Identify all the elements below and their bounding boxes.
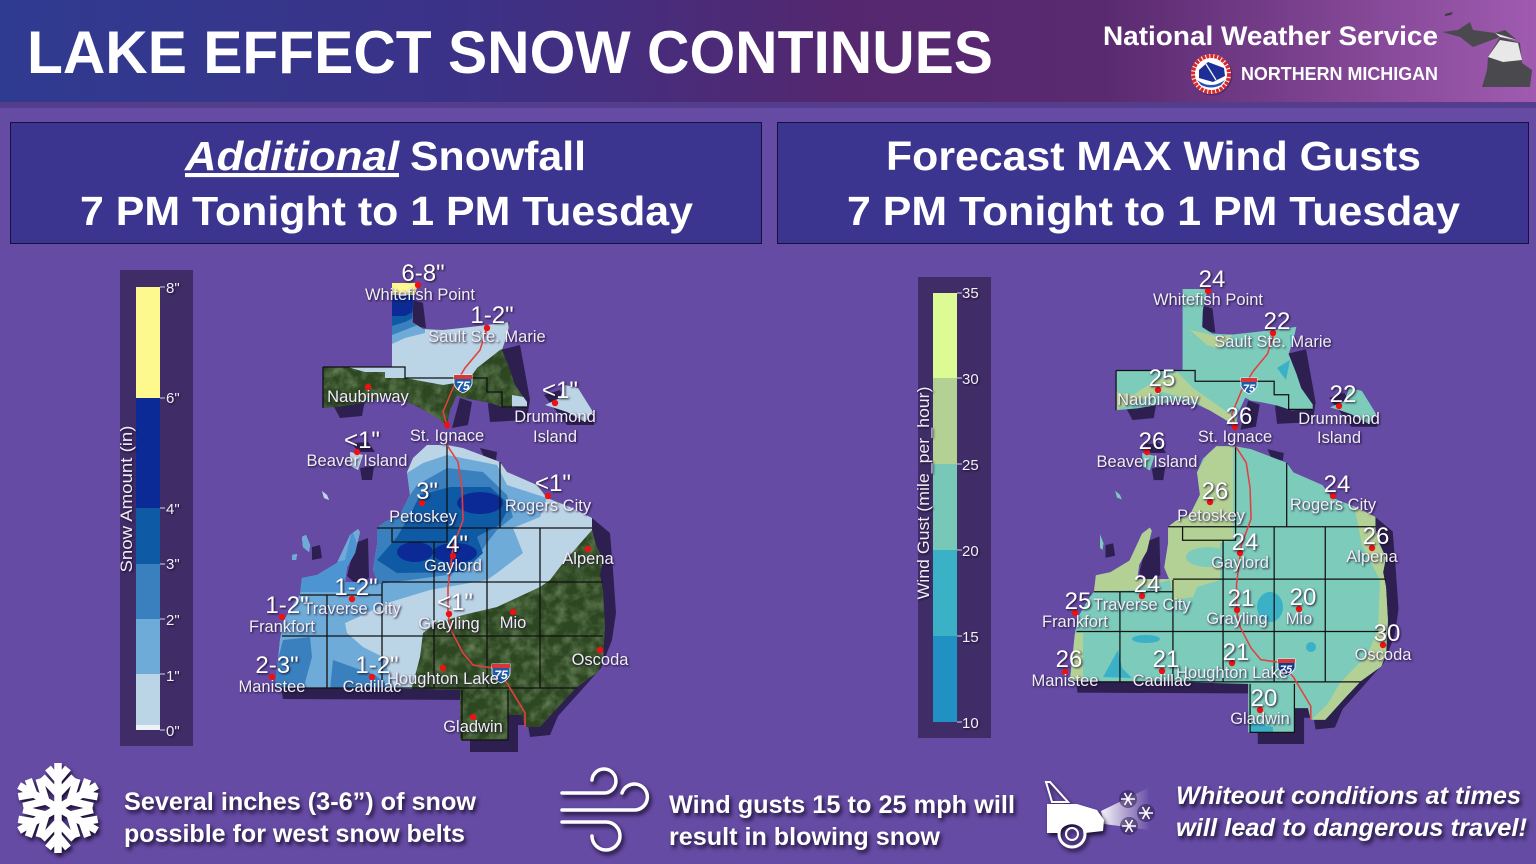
city names: Manistee — [239, 678, 305, 696]
legend tick labels: 15 — [962, 629, 979, 646]
heading: additional: Additional — [184, 133, 401, 179]
text: snow impact: possible for west snow belts — [124, 820, 465, 848]
city names: Sault Ste. Marie — [428, 328, 546, 346]
legend tick labels: 6" — [166, 390, 180, 407]
icon: Michigan locator map — [1442, 12, 1532, 87]
city names: Grayling — [1206, 610, 1268, 628]
title: LAKE EFFECT SNOW CONTINUES — [27, 19, 993, 86]
city names: Island — [1317, 429, 1361, 447]
icon: car in whiteout — [1046, 782, 1155, 847]
legend tick labels: 3" — [166, 556, 180, 573]
legend tick labels: 1" — [166, 668, 180, 685]
city names: Oscoda — [572, 651, 629, 669]
legend tick labels: 35 — [962, 285, 979, 302]
wind gust values: 24 — [1134, 571, 1160, 598]
city names: Petoskey — [389, 508, 458, 526]
city names: Houghton Lake — [387, 670, 499, 688]
heading: snowfall time range: 7 PM Tonight to 1 PM Tuesday — [80, 188, 693, 234]
wind gust values: 20 — [1290, 584, 1316, 611]
icon: I-75 north shield — [1241, 378, 1257, 395]
map: additional snowfall — [239, 260, 629, 752]
office name: National Weather Service — [1103, 21, 1438, 51]
snowfall amounts — [255, 260, 578, 679]
heading: forecast max wind gusts: Forecast MAX Wind Gusts — [886, 133, 1421, 179]
interstate 75 — [443, 328, 525, 727]
snowfall amounts: 1-2" — [334, 574, 378, 601]
snowfall amounts: 6-8" — [401, 260, 445, 287]
wind gust values: 26 — [1056, 646, 1082, 673]
wind gust values: 26 — [1202, 478, 1228, 505]
heading: wind time range: 7 PM Tonight to 1 PM Tuesday — [847, 188, 1460, 234]
text: wind impact — [669, 791, 1015, 851]
heading: snowfall: Snowfall — [410, 133, 586, 179]
snowfall amounts: <1" — [344, 427, 380, 454]
snowfall amounts: 1-2" — [265, 592, 309, 619]
legend tick labels: 10 — [962, 715, 979, 732]
icon: wind — [562, 769, 647, 850]
city names: Drummond — [514, 408, 596, 426]
lower peninsula snow bands — [275, 445, 592, 689]
county boundaries — [1070, 371, 1386, 732]
wind gust values: 26 — [1363, 523, 1389, 550]
wind gust values: 21 — [1223, 639, 1249, 666]
icon: I-75 south shield — [492, 664, 510, 683]
city names: Frankfort — [1042, 613, 1108, 631]
text: wind impact: Wind gusts 15 to 25 mph will — [669, 791, 1015, 819]
map: forecast max wind gusts — [1032, 266, 1412, 750]
legend tick labels: 4" — [166, 501, 180, 518]
wind gust values: 25 — [1065, 588, 1091, 615]
wind gust values — [1056, 266, 1400, 712]
legend tick labels: 30 — [962, 371, 979, 388]
icon: I-75 north shield: 75 — [1243, 383, 1256, 395]
text: snow impact — [124, 788, 477, 848]
legend axis title: Snow Amount (in) — [117, 426, 136, 572]
legend: wind gust colour bar — [914, 277, 991, 738]
legend: snow amount colour bar — [117, 270, 193, 746]
icon: I-75 north shield: 75 — [456, 379, 470, 393]
city names: Cadillac — [1133, 672, 1191, 690]
city names: Petoskey — [1177, 507, 1246, 525]
city names: Whitefish Point — [365, 286, 475, 304]
city names: Alpena — [562, 550, 615, 568]
city names: Beaver Island — [307, 452, 407, 470]
city names: Naubinway — [1117, 391, 1200, 409]
legend tick labels — [962, 285, 979, 732]
city names: Grayling — [418, 615, 480, 633]
wind gust values: 25 — [1149, 365, 1175, 392]
icon: I-75 south shield: 75 — [494, 668, 508, 682]
panel: wind heading — [778, 122, 1528, 244]
city names: Gladwin — [1230, 710, 1290, 728]
city names — [239, 286, 629, 736]
wind gust values: 20 — [1251, 685, 1277, 712]
city names: Frankfort — [249, 618, 315, 636]
legend tick labels: 25 — [962, 457, 979, 474]
snowfall amounts: <1" — [437, 589, 473, 616]
wind gust values: 24 — [1199, 266, 1225, 293]
snowfall amounts: 4" — [446, 531, 468, 558]
office region: NORTHERN MICHIGAN — [1241, 64, 1438, 84]
city names: Alpena — [1346, 548, 1399, 566]
city markers — [269, 282, 603, 720]
wind gust values: 22 — [1264, 308, 1290, 335]
text: wind impact: result in blowing snow — [669, 823, 941, 851]
snowfall amounts: <1" — [542, 377, 578, 404]
city names: Rogers City — [505, 497, 592, 515]
city names: Traverse City — [303, 600, 401, 618]
wind gust values: 26 — [1226, 403, 1252, 430]
icon: snowflake — [11, 763, 105, 853]
lower gust zones — [1186, 547, 1220, 567]
legend tick labels: 2" — [166, 612, 180, 629]
city names: St. Ignace — [410, 427, 484, 445]
legend tick labels: 20 — [962, 543, 979, 560]
text: snow impact: Several inches (3-6”) of snow — [124, 788, 477, 816]
city names: Manistee — [1032, 672, 1098, 690]
city names: Mio — [500, 614, 526, 632]
city names: Traverse City — [1093, 596, 1191, 614]
wind gust values: 22 — [1330, 381, 1356, 408]
city names: Naubinway — [327, 388, 410, 406]
icon: NWS logo — [1191, 54, 1232, 96]
snowfall amounts: 1-2" — [355, 652, 399, 679]
city names: Sault Ste. Marie — [1214, 333, 1332, 351]
city names: Beaver Island — [1097, 453, 1197, 471]
wind gust values: 26 — [1139, 428, 1165, 455]
city names: St. Ignace — [1198, 428, 1272, 446]
icon: I-75 north shield — [454, 375, 472, 393]
city names: Gladwin — [443, 718, 503, 736]
wind gust values: 30 — [1374, 620, 1400, 647]
interstate 75 — [1232, 333, 1311, 720]
wind gust values: 24 — [1324, 471, 1350, 498]
icon: I-75 south shield: 75 — [1280, 664, 1293, 676]
wind gust values: 21 — [1228, 585, 1254, 612]
snowfall amounts: 2-3" — [255, 652, 299, 679]
higher gust zones — [1090, 445, 1233, 600]
city names: Gaylord — [1211, 554, 1269, 572]
city names: Island — [533, 428, 577, 446]
city names: Mio — [1286, 610, 1312, 628]
wind gust values: 24 — [1232, 529, 1258, 556]
snowfall amounts: 1-2" — [470, 302, 514, 329]
city names: Oscoda — [1355, 646, 1412, 664]
city names: Houghton Lake — [1176, 664, 1288, 682]
city names: Rogers City — [1290, 496, 1377, 514]
snowfall amounts: <1" — [535, 470, 571, 497]
legend tick labels: 0" — [166, 723, 180, 740]
legend axis title: Wind Gust (mile_per_hour) — [914, 386, 933, 600]
city names: Cadillac — [343, 678, 401, 696]
wind gust values: 21 — [1153, 646, 1179, 673]
icon: I-75 south shield — [1278, 659, 1295, 676]
county boundaries — [275, 367, 603, 740]
panel: snowfall heading — [10, 122, 762, 244]
snowfall amounts: 3" — [416, 478, 438, 505]
legend tick labels — [166, 280, 180, 740]
text: travel impact: will lead to dangerous travel! — [1176, 814, 1527, 842]
city names: Whitefish Point — [1153, 291, 1263, 309]
city names — [1032, 291, 1412, 728]
legend tick labels: 8" — [166, 280, 180, 297]
text: travel impact — [1176, 782, 1527, 842]
city markers — [1062, 288, 1386, 713]
city names: Gaylord — [424, 557, 482, 575]
upper peninsula snow bands — [385, 280, 512, 385]
text: travel impact: Whiteout conditions at times — [1176, 782, 1521, 810]
header banner — [0, 0, 1536, 108]
city names: Drummond — [1298, 410, 1380, 428]
